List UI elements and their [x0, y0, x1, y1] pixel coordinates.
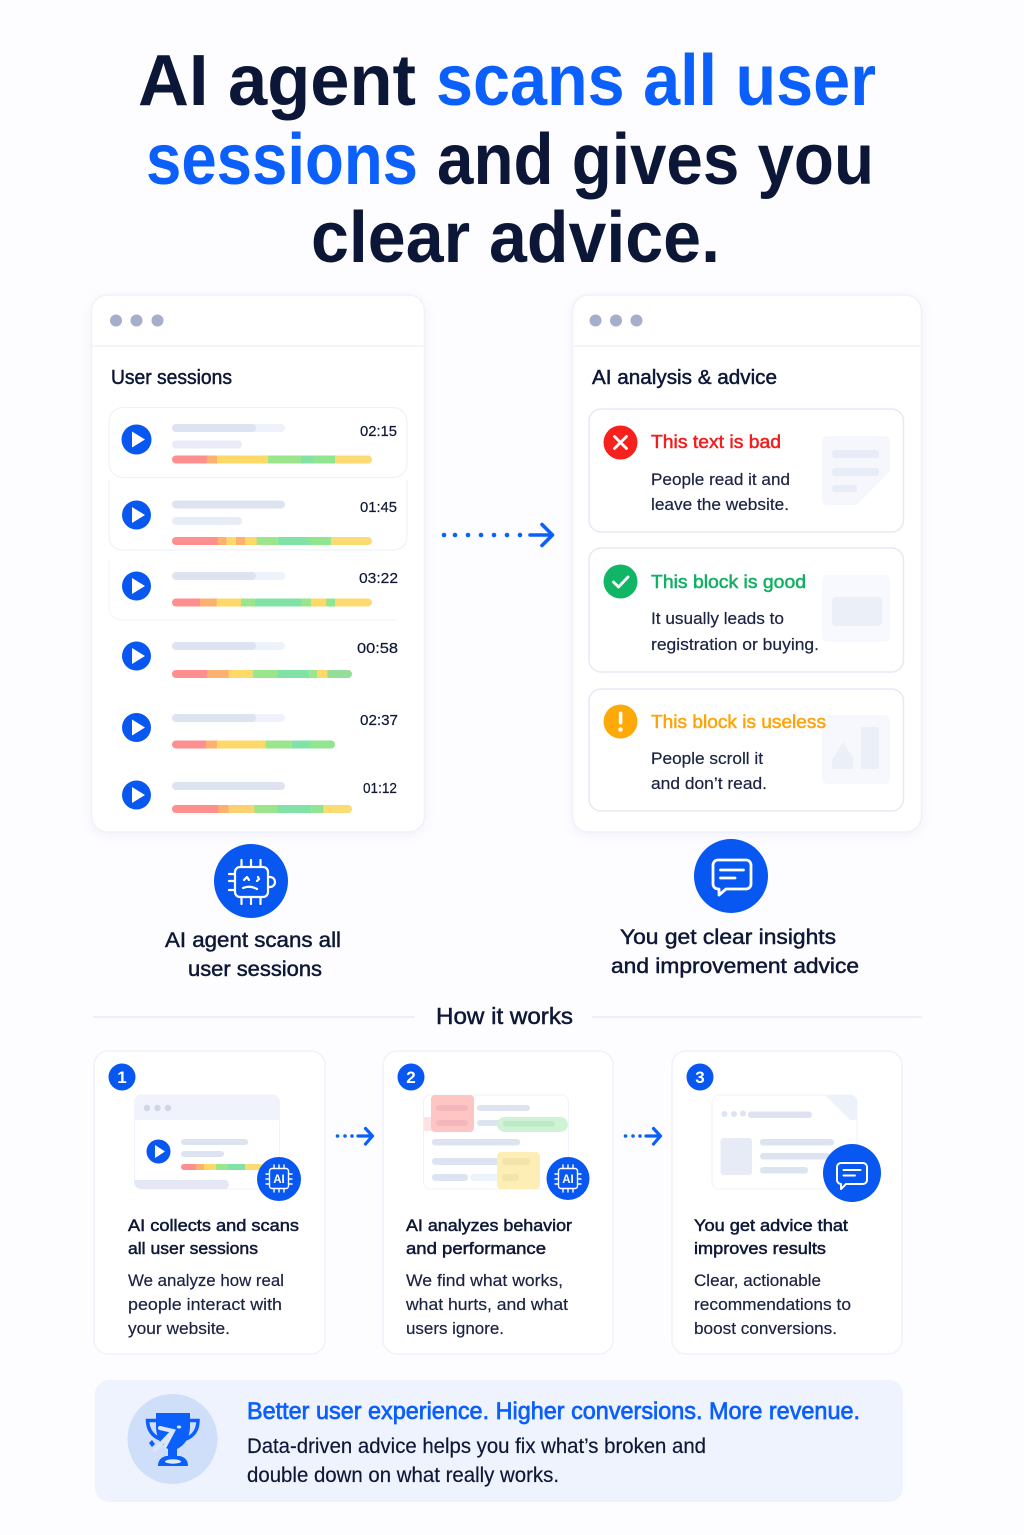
step 3 card: boost conversions.: [694, 1319, 837, 1338]
step 2 card: [383, 1051, 613, 1354]
arrow: sessions to advice: [442, 524, 552, 546]
session row 6: 01:12: [363, 780, 397, 797]
advice card: bad text: This text is bad: [651, 432, 781, 452]
session row 3: [109, 560, 398, 620]
badge 3: [686, 1064, 714, 1090]
caption: AI agent scans: user sessions: [188, 957, 322, 981]
advice card: good block: registration or buying.: [651, 635, 819, 654]
icon: AI chip: [257, 1157, 301, 1201]
panel: user sessions: [92, 295, 424, 832]
window dots: [590, 314, 642, 326]
step 2 card: AI analyzes behavior: [406, 1216, 572, 1235]
step 1 card: We analyze how real: [128, 1271, 284, 1290]
window dots: [110, 314, 164, 326]
icon: chat bubble: [823, 1144, 881, 1202]
advice card: good block: This block is good: [651, 572, 806, 592]
title: scans all user: [436, 41, 876, 121]
advice card: good block: [589, 548, 904, 672]
session row 4: 00:58: [357, 640, 398, 657]
advice card: useless block: This block is useless: [651, 712, 826, 732]
caption: AI agent scans: [165, 928, 341, 981]
advice card: bad text: [589, 409, 904, 532]
badge 1: 1: [117, 1068, 127, 1087]
session row 2: 01:45: [360, 499, 397, 516]
step 3 card: You get advice that: [694, 1216, 848, 1235]
step 1 card: your website.: [128, 1319, 230, 1338]
panel: AI analysis and advice: [572, 295, 922, 832]
step 2 card: We find what works,: [406, 1271, 563, 1290]
advice card: useless block: and don’t read.: [651, 774, 767, 793]
ghost icon: chart: [822, 715, 890, 784]
illustration: session window: [134, 1095, 280, 1189]
step 2 card: users ignore.: [406, 1319, 504, 1338]
session row 5: 02:37: [360, 712, 398, 729]
step 2 card: and performance: [406, 1239, 546, 1258]
panel heading: AI analysis: AI analysis & advice: [592, 367, 777, 389]
session row 6: [122, 780, 397, 813]
banner: results callout: double down on what really works.: [247, 1464, 559, 1487]
icon: AI chip: AI: [562, 1174, 574, 1186]
advice card: good block: It usually leads to: [651, 609, 784, 628]
advice card: useless block: [589, 689, 904, 811]
illustration: heatmap page: [424, 1095, 568, 1189]
ghost icon: document: [822, 436, 890, 505]
badge 3: 3: [695, 1068, 705, 1087]
icon: trophy: [128, 1394, 218, 1484]
ghost icon: block: [822, 575, 890, 642]
panel heading: user sessions: User sessions: [111, 367, 232, 389]
badge 2: [398, 1064, 424, 1090]
caption: AI agent scans: AI agent scans all: [165, 928, 341, 952]
illustration: advice page: [712, 1095, 857, 1189]
icon: AI chip face: [214, 844, 288, 918]
session row 1: 02:15: [360, 423, 397, 440]
step 1 card: AI collects and scans: [128, 1216, 299, 1235]
step 3 card: recommendations to: [694, 1295, 851, 1314]
session row 1: [109, 408, 407, 478]
banner: results callout: [95, 1380, 903, 1502]
session row 5: [122, 712, 398, 748]
advice card: useless block: People scroll it: [651, 749, 763, 768]
divider heading: how it works: How it works: [436, 1003, 573, 1029]
icon: AI chip: [546, 1157, 590, 1200]
step 2 card: what hurts, and what: [405, 1295, 568, 1314]
step 1 card: [94, 1051, 325, 1354]
session row 4: [122, 640, 398, 678]
caption: clear insights: You get clear insights: [620, 925, 836, 949]
banner: results callout: Data-driven advice helps you fix what’s broken and: [247, 1435, 706, 1458]
advice card: bad text: leave the website.: [651, 495, 789, 514]
title: sessions: [146, 120, 418, 200]
session row 3: 03:22: [359, 570, 398, 587]
step 3 card: [672, 1051, 902, 1354]
badge 1: [108, 1064, 136, 1090]
step 1 card: all user sessions: [128, 1239, 258, 1258]
session row 2: [109, 480, 407, 550]
icon: AI chip: AI: [273, 1174, 285, 1186]
step 1 card: people interact with: [128, 1295, 282, 1314]
title: clear advice.: [311, 198, 720, 278]
arrow: step 2 to 3: [624, 1128, 660, 1144]
step 3 card: improves results: [694, 1239, 826, 1258]
caption: clear insights: [611, 925, 859, 978]
caption: clear insights: and improvement advice: [611, 954, 859, 978]
title: and gives you: [437, 120, 874, 200]
arrow: step 1 to 2: [336, 1128, 372, 1144]
icon: chat bubble: [694, 839, 768, 913]
step 3 card: Clear, actionable: [694, 1271, 821, 1290]
badge 2: 2: [406, 1068, 416, 1087]
advice card: bad text: People read it and: [651, 470, 790, 489]
banner: results callout: Better user experience. Higher conversions. More revenue.: [247, 1398, 860, 1425]
title: AI agent: [138, 41, 416, 121]
title: [138, 41, 876, 278]
